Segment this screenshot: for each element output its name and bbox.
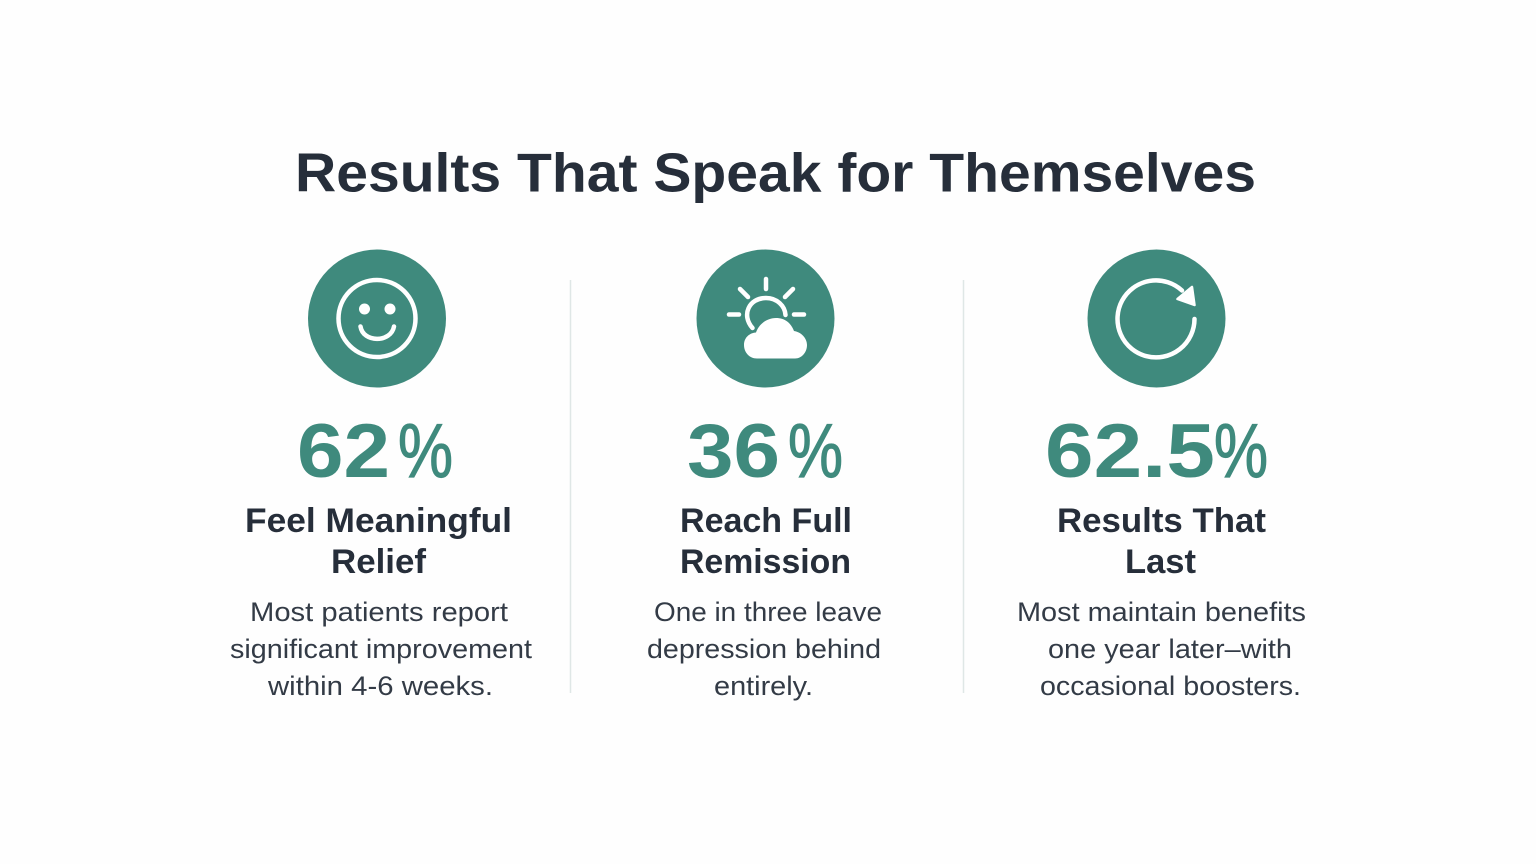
heading: results that last xyxy=(1057,502,1266,581)
description: most patients: significant improvement xyxy=(230,634,533,664)
icon: sun behind cloud xyxy=(696,250,834,388)
description: one in three xyxy=(647,597,882,701)
panel: reach full remission xyxy=(647,250,882,701)
stat: 62%: 62 xyxy=(297,409,390,494)
description: most patients xyxy=(230,597,533,701)
title: Results That Speak for Themselves xyxy=(295,142,1256,204)
heading: feel meaningful relief: Feel Meaningful xyxy=(245,502,512,540)
stat: 36% xyxy=(687,409,843,494)
panel: feel meaningful relief xyxy=(230,250,533,701)
description: one in three: depression behind xyxy=(647,634,881,664)
stat: 62% xyxy=(297,409,453,494)
heading: reach full remission xyxy=(680,502,852,581)
heading: results that last: Last xyxy=(1125,543,1196,581)
description: most patients: Most patients report xyxy=(250,597,509,627)
stat: 36%: % xyxy=(788,409,843,494)
stat: 62.5% xyxy=(1045,409,1268,494)
icon: circular arrow xyxy=(1088,250,1226,388)
stat: 62%: % xyxy=(398,409,453,494)
heading: feel meaningful relief xyxy=(245,502,512,581)
description: most maintain: occasional boosters. xyxy=(1040,671,1301,701)
stat: 62.5%: 62.5 xyxy=(1045,409,1215,494)
heading: reach full remission: Reach Full xyxy=(680,502,852,540)
panel: results that last xyxy=(1017,250,1306,701)
icon: smiley face xyxy=(308,250,446,388)
description: most maintain xyxy=(1017,597,1306,701)
description: most maintain: Most maintain benefits xyxy=(1017,597,1306,627)
stat: 36%: 36 xyxy=(687,409,780,494)
heading: results that last: Results That xyxy=(1057,502,1266,540)
stat: 62.5%: % xyxy=(1214,409,1268,494)
heading: reach full remission: Remission xyxy=(680,543,851,581)
description: most maintain: one year later–with xyxy=(1048,634,1292,664)
description: one in three: One in three leave xyxy=(654,597,882,627)
description: most patients: within 4-6 weeks. xyxy=(267,671,493,701)
description: one in three: entirely. xyxy=(714,671,813,701)
heading: feel meaningful relief: Relief xyxy=(331,543,427,581)
